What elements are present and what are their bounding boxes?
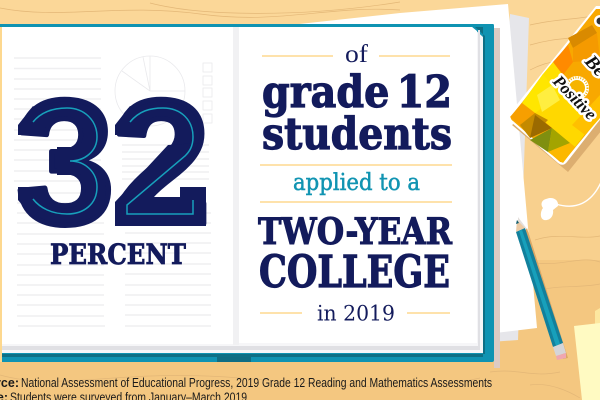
right page headline bbox=[258, 41, 453, 326]
TWO-YEAR: TWO-YEAR bbox=[258, 211, 453, 253]
faint legend squares bbox=[203, 63, 212, 123]
in 2019 with rules bbox=[260, 312, 450, 314]
students: students bbox=[262, 109, 452, 160]
COLLEGE: COLLEGE bbox=[259, 247, 450, 298]
right page bbox=[238, 27, 477, 343]
pencil bbox=[516, 217, 568, 360]
grade 12: grade 12 bbox=[262, 67, 452, 118]
gutter bbox=[233, 27, 239, 345]
applied to a: applied to a bbox=[293, 170, 420, 196]
source line: National Assessment of Educational Progress, 2019 Grade 12 Reading and Mathematics Assessments bbox=[21, 376, 492, 390]
sticky notes bbox=[574, 308, 600, 400]
white sheet under book bbox=[290, 4, 537, 333]
of with rules bbox=[262, 55, 450, 57]
ferrule bbox=[553, 343, 566, 356]
left page bbox=[2, 27, 233, 344]
faint page text lines, right column bbox=[122, 145, 211, 326]
book bbox=[0, 24, 500, 368]
pencil body bbox=[516, 228, 563, 347]
earbud and cable bbox=[541, 180, 600, 220]
right page headline: of bbox=[345, 41, 369, 68]
faint pie chart bbox=[115, 56, 185, 126]
eraser bbox=[556, 353, 566, 360]
phone facets bbox=[522, 74, 600, 147]
grey sheet under book bbox=[490, 14, 529, 342]
pencil tip bbox=[516, 220, 525, 232]
book shadow bbox=[494, 28, 500, 368]
phone bbox=[508, 6, 600, 172]
faint page text lines, left column bbox=[14, 58, 105, 326]
big number 32: 32 bbox=[16, 62, 211, 262]
Be Positive sticker text: Positive bbox=[548, 71, 600, 124]
teal inline bbox=[33, 108, 97, 214]
page stack bbox=[0, 27, 483, 353]
right page headline: in 2019 bbox=[317, 302, 395, 326]
pencil shadow bbox=[524, 228, 568, 359]
phone shadow bbox=[512, 60, 600, 172]
camera bbox=[594, 15, 600, 27]
word PERCENT: PERCENT bbox=[50, 238, 186, 271]
digit terminals and foot bbox=[18, 106, 206, 226]
phone body bbox=[508, 6, 600, 165]
paper corner behind pencil tip bbox=[518, 217, 527, 229]
sun on sticker bbox=[565, 76, 589, 100]
book cover bbox=[0, 24, 494, 362]
